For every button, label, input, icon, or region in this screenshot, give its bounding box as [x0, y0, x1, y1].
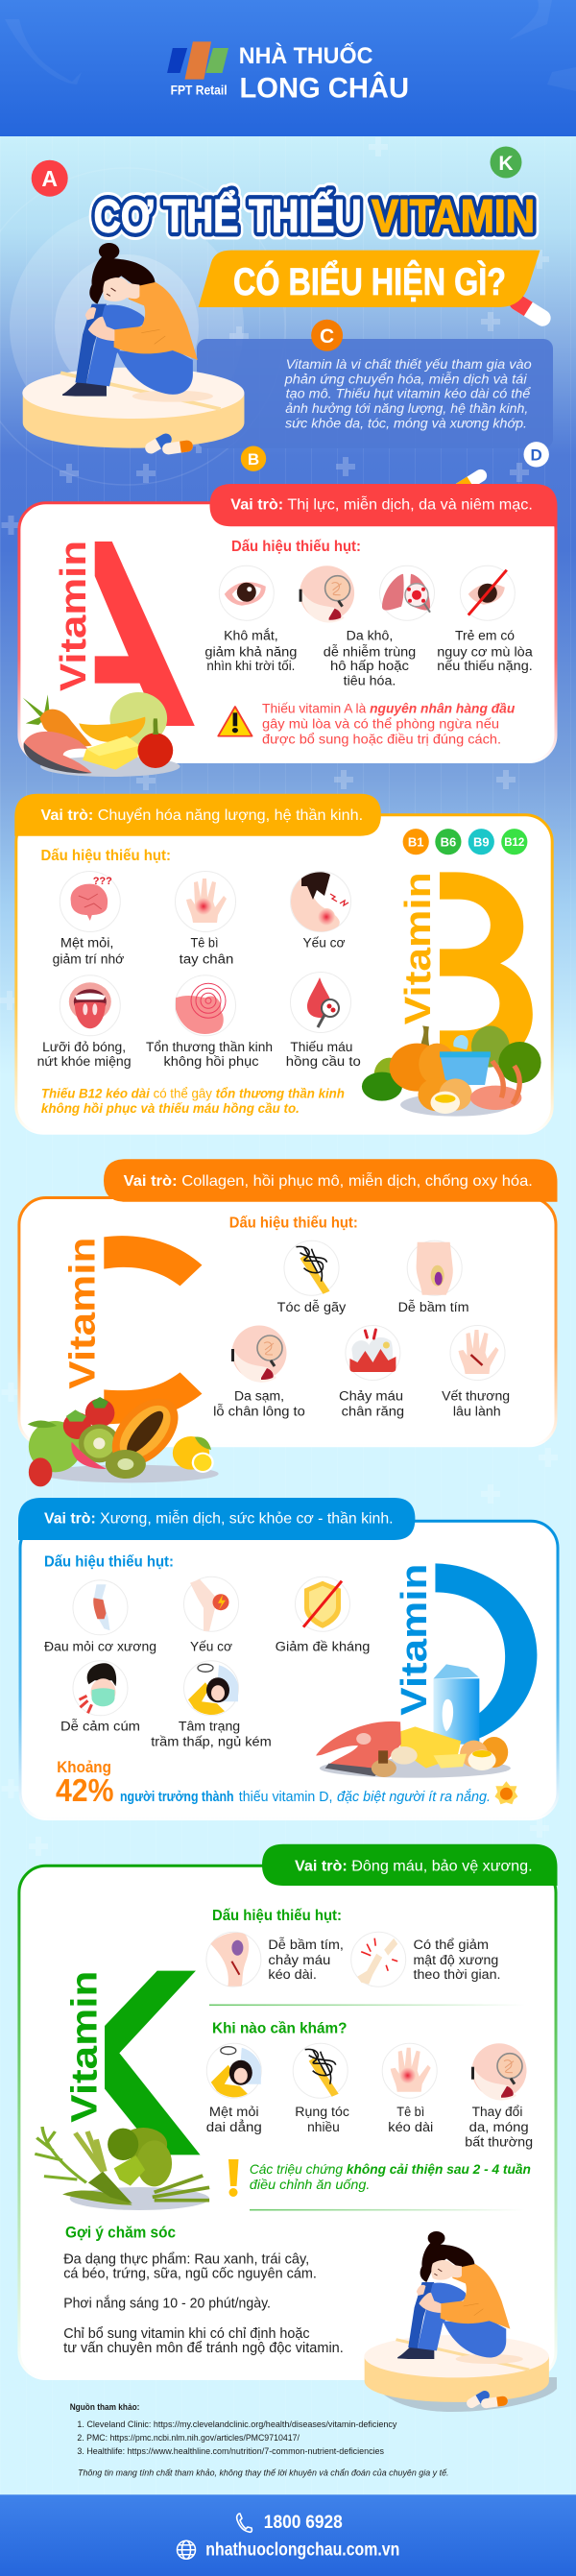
panel: vitamin K [19, 1844, 557, 2379]
big letter B [440, 872, 533, 1059]
callout: B12 [41, 1085, 345, 1116]
icon: weak bone [351, 1932, 406, 1986]
callout: symptoms: Các triệu chứng không cải thiện sau 2 - 4 tuần [250, 2161, 531, 2177]
callout: symptoms: điều chỉnh ăn uống. [250, 2177, 370, 2192]
icon: low immunity shield [296, 1577, 349, 1631]
label: fatigue: Mệt mỏi [209, 2105, 259, 2119]
label: hair loss: Rụng tóc [295, 2105, 349, 2119]
label: blindness risk: nếu thiếu nặng. [437, 659, 533, 673]
icon: bleeding gums [346, 1325, 400, 1381]
intro paragraph: phản ứng chuyển hóa, miễn dịch và tái [284, 372, 528, 386]
decorative plus signs [0, 137, 558, 1856]
text: bruising: Dễ bầm tím, [268, 1938, 344, 1952]
brand line 2: LONG CHÂU [240, 72, 409, 105]
icon: knee weakness [184, 1577, 238, 1631]
footer [0, 2494, 576, 2576]
website: nhathuoclongchau.com.vn [205, 2540, 399, 2561]
illustration: woman on pill, lower [364, 2231, 549, 2402]
references: 3. Healthlife: https://www.healthline.com/nutrition/7-common-nutrient-deficiencies [77, 2446, 384, 2456]
label: tongue: Lưỡi đỏ bóng, [42, 1040, 126, 1054]
title outline: VITAMIN [372, 192, 535, 243]
heading: signs: Dấu hiệu thiếu hụt: [40, 848, 171, 864]
icon: red tongue [60, 975, 120, 1036]
heading: signs: Dấu hiệu thiếu hụt: [44, 1554, 174, 1571]
panel: vitamin D [18, 1498, 558, 1818]
label: nerve damage [146, 1040, 273, 1069]
vertical word Vitamin: Vitamin [63, 1238, 104, 1389]
badge K: K [498, 153, 514, 175]
subtitle banner [199, 251, 540, 307]
tab: role [262, 1844, 557, 1886]
badge C [311, 320, 343, 351]
stat: 42 percent: 42% [56, 1772, 113, 1808]
big letter A [95, 542, 195, 726]
label: skin change: Thay đổi [472, 2105, 522, 2119]
title navy outline: VITAMIN [372, 192, 535, 243]
text: bone density: mật độ xương [413, 1953, 498, 1967]
label: dull skin: Da sạm, [234, 1388, 284, 1403]
icon: globe [177, 2540, 196, 2559]
icon: spine pain [73, 1580, 128, 1635]
decorative glass spheres [0, 168, 285, 485]
badges: B vitamins: B12 [504, 837, 524, 849]
title outline: CƠ THỂ THIẾU [94, 191, 362, 243]
references [70, 2402, 448, 2478]
badges: B vitamins: B6 [441, 835, 456, 849]
icon: abnormal skin [471, 2043, 526, 2101]
stat: 42 percent: đặc biệt người ít ra nắng. [337, 1789, 491, 1805]
label: weak muscle: Yếu cơ [190, 1639, 232, 1653]
label: fatigue: dai dẳng [206, 2120, 262, 2134]
tab: role: Vai trò: Đông máu, bảo vệ xương. [295, 1858, 533, 1874]
icon: infected lungs [380, 566, 434, 620]
icon: persistent fatigue [206, 2043, 261, 2098]
badge C: C [320, 325, 334, 348]
food: vitamin D sources [316, 1664, 511, 1778]
intro paragraph: Vitamin là vi chất thiết yếu tham gia vào [286, 357, 532, 372]
label: low immunity: Giảm đề kháng [276, 1639, 370, 1653]
icon: slow healing wound [450, 1325, 505, 1381]
text: bone density: Có thể giảm [413, 1938, 489, 1952]
text: bone density [413, 1938, 501, 1982]
badge D [524, 442, 549, 467]
icon: brain fatigue: ??? [93, 876, 112, 887]
label: fatigue: giảm trí nhớ [53, 951, 124, 966]
big letter C [104, 1236, 202, 1424]
pill shadow [370, 2377, 557, 2412]
callout: B12: không hồi phục và thiếu máu hồng cầu to. [41, 1100, 300, 1116]
badge A [32, 160, 68, 197]
label: mood: trầm thấp, ngủ kém [151, 1734, 272, 1748]
label: nerve damage: không hồi phục [163, 1054, 259, 1069]
vertical word Vitamin: Vitamin [54, 541, 94, 691]
label: dry eye: nhìn khi trời tối. [206, 659, 295, 673]
intro paragraph [284, 357, 532, 431]
intro paragraph: tạo mô. Thiếu hụt vitamin kéo dài có thể [286, 387, 532, 401]
tab: role: Vai trò: Collagen, hồi phục mô, miễn dịch, chống oxy hóa. [124, 1171, 533, 1190]
vertical word Vitamin: Vitamin [398, 872, 439, 1024]
illustration: sad woman on pill [22, 243, 244, 448]
warning text: được bổ sung hoặc điều trị đúng cách. [262, 731, 501, 746]
warning text [262, 700, 516, 746]
tab: role [104, 1159, 557, 1202]
food: vitamin C sources [28, 1388, 219, 1486]
icon: sun [494, 1781, 517, 1804]
text: care tips: Đa dạng thực phẩm: Rau xanh, trái cây, [63, 2251, 309, 2267]
text: bruising [268, 1938, 344, 1982]
icon: bruise hand [407, 1240, 462, 1295]
logo caption: FPT Retail [171, 83, 228, 98]
icon: numb hand [175, 872, 236, 931]
label: fatigue [206, 2105, 262, 2134]
title [94, 191, 535, 243]
references: Nguồn tham khảo: [70, 2402, 139, 2413]
label: anemia: Thiếu máu [290, 1040, 352, 1054]
text: bruising: kéo dài. [268, 1967, 317, 1982]
label: skin change: da, móng [469, 2120, 529, 2134]
food: vitamin B sources [362, 1025, 541, 1117]
label: anemia: hồng cầu to [286, 1054, 361, 1069]
label: nerve damage: Tổn thương thần kinh [146, 1040, 273, 1054]
label: numbness: Tê bì [190, 936, 219, 951]
label: tongue [37, 1040, 132, 1069]
icon: brittle hair [284, 1240, 339, 1295]
text: bone density: theo thời gian. [413, 1967, 501, 1982]
label: gums [339, 1388, 404, 1418]
logo mark stripes [167, 41, 228, 80]
references: Thông tin mang tính chất tham khảo, không thay thế lời khuyên và chẩn đoán của chuyên gia y tế. [78, 2468, 449, 2478]
intro paragraph: sức khỏe da, tóc, móng và xương khớp. [285, 417, 527, 431]
label: tongue: nứt khóe miệng [37, 1054, 132, 1069]
text: care tips [63, 2251, 344, 2356]
badge D: D [531, 446, 542, 465]
label: brittle hair: Tóc dễ gãy [277, 1300, 347, 1314]
tab: role [14, 794, 381, 836]
label: pain: Đau mỏi cơ xương [44, 1639, 156, 1653]
heading: signs: Dấu hiệu thiếu hụt: [231, 539, 361, 555]
big letter K [105, 1971, 201, 2155]
label: dry eye: Khô mắt, [224, 629, 278, 643]
icon: yellow white capsule [451, 467, 490, 497]
brand line 1: NHÀ THUỐC [239, 42, 373, 69]
label: skin change [465, 2105, 533, 2150]
references: 2. PMC: https://pmc.ncbi.nlm.nih.gov/articles/PMC9710417/ [77, 2433, 300, 2443]
badge K [490, 146, 522, 179]
panel: vitamin A [19, 484, 557, 777]
stat: 42 percent: người trưởng thành [120, 1790, 234, 1805]
label: blindness risk [437, 629, 533, 673]
text: care tips: tư vấn chuyên môn để tránh ngộ độc vitamin. [63, 2341, 344, 2356]
badge A: A [41, 166, 58, 191]
food: vitamin K sources [35, 2127, 209, 2210]
badge B [241, 445, 266, 471]
label: wounds: lâu lành [453, 1404, 501, 1418]
phone number: 1800 6928 [264, 2513, 343, 2533]
icon: exclamation mark [228, 2159, 238, 2197]
label: fatigue: Mệt mỏi, [60, 936, 113, 951]
icon: small capsules on hero [143, 431, 194, 456]
label: dry skin: dễ nhiễm trùng [324, 644, 416, 659]
icon: low mood [184, 1661, 238, 1716]
vertical word Vitamin: Vitamin [64, 1971, 105, 2123]
label: easy bruising: Dễ bầm tím [398, 1300, 469, 1314]
heading: when to see a doctor: Khi nào cần khám? [212, 2020, 348, 2036]
icon: nerve damage [175, 975, 236, 1036]
vertical word Vitamin: Vitamin [395, 1564, 435, 1716]
stat: 42 percent [56, 1758, 491, 1808]
title navy outline: CƠ THỂ THIẾU [94, 191, 362, 243]
label: mood: Tâm trạng [179, 1719, 240, 1733]
label: numbness: kéo dài [388, 2120, 433, 2134]
icon: dry eye [219, 566, 274, 620]
icon: muscle weakness [290, 872, 351, 931]
label: dry eye [204, 629, 297, 673]
tab: role [209, 484, 557, 526]
heading: signs: Dấu hiệu thiếu hụt: [212, 1908, 342, 1924]
icon: blood drop [290, 972, 351, 1033]
icon: warning triangle [218, 707, 252, 736]
label: dry eye: giảm khả năng [204, 644, 297, 659]
label: blindness risk: nguy cơ mù lòa [437, 644, 533, 659]
tab: role: Vai trò: Xương, miễn dịch, sức khỏe cơ - thần kinh. [44, 1509, 394, 1528]
header band [0, 0, 576, 136]
label: dull skin: lỗ chân lông to [213, 1404, 305, 1418]
icon: hair loss [293, 2043, 348, 2098]
big letter D [435, 1563, 537, 1743]
panel: vitamin B [14, 794, 552, 1133]
tab: role [18, 1498, 415, 1540]
label: wounds: Vết thương [442, 1388, 510, 1403]
label: numbness [388, 2105, 433, 2134]
text: care tips: cá béo, trứng, sữa, ngũ cốc nguyên cám. [63, 2266, 317, 2281]
title line white part: CƠ THỂ THIẾU [94, 191, 362, 243]
callout: B12: Thiếu B12 kéo dài có thể gây tổn thương thần kinh [41, 1085, 345, 1100]
subtitle text: CÓ BIỂU HIỆN GÌ? [233, 258, 506, 303]
label: fatigue [53, 936, 124, 966]
badges: B vitamins: B9 [473, 835, 490, 849]
icon: night blindness eye [460, 566, 515, 620]
intro paragraph: ảnh hưởng tới năng lượng, hệ thần kinh, [285, 401, 528, 416]
label: numbness: tay chân [180, 951, 233, 966]
icon: cold and flu [73, 1661, 128, 1716]
references: 1. Cleveland Clinic: https://my.clevelandclinic.org/health/diseases/vitamin-deficiency [77, 2420, 397, 2429]
label: numbness: Tê bì [396, 2105, 424, 2119]
title word vitamin: VITAMIN [372, 192, 535, 243]
heading: care tips: Gợi ý chăm sóc [65, 2224, 176, 2242]
label: blindness risk: Trẻ em có [455, 629, 515, 643]
label: skin change: bất thường [465, 2135, 533, 2150]
icon: brain fatigue [60, 872, 120, 931]
tab: role: Vai trò: Chuyển hóa năng lượng, hệ thần kinh. [40, 807, 363, 824]
badge B: B [248, 450, 259, 469]
label: dull skin [213, 1388, 305, 1418]
icon: phone [237, 2514, 252, 2532]
icon: dry skin [300, 566, 354, 623]
label: muscle weakness: Yếu cơ [303, 936, 346, 951]
label: hair loss: nhiều [307, 2120, 340, 2134]
label: dry skin [324, 629, 416, 687]
warning text: gây mù lòa và có thể phòng ngừa nếu [262, 716, 499, 732]
icon: red white capsule [506, 291, 554, 329]
heading: signs: Dấu hiệu thiếu hụt: [229, 1216, 358, 1232]
tab: role: Vai trò: Thị lực, miễn dịch, da và niêm mạc. [230, 495, 533, 514]
text: care tips: Phơi nắng sáng 10 - 20 phút/ngày. [63, 2295, 271, 2311]
label: wounds [442, 1388, 510, 1418]
icon: bruised leg [206, 1932, 261, 1986]
label: dry skin: tiêu hóa. [344, 673, 396, 687]
badges: B vitamins [403, 829, 527, 855]
text: bruising: chảy máu [268, 1953, 330, 1967]
label: colds: Dễ cảm cúm [60, 1719, 140, 1733]
label: dry skin: Da khô, [347, 629, 393, 643]
callout: symptoms [250, 2161, 531, 2192]
label: gums: chân răng [342, 1404, 404, 1418]
icon: small capsules lower [465, 2389, 509, 2410]
text: care tips: Chỉ bổ sung vitamin khi có chỉ định hoặc [63, 2326, 310, 2342]
panel: vitamin C [19, 1159, 557, 1486]
logo: FPT Retail Long Châu [167, 41, 409, 105]
label: mood [151, 1719, 272, 1748]
icon: dull skin [231, 1325, 286, 1383]
label: dry skin: hô hấp hoặc [330, 659, 409, 673]
badges: B vitamins: B1 [408, 835, 424, 849]
label: gums: Chảy máu [339, 1388, 403, 1403]
stat: 42 percent: thiếu vitamin D, [239, 1790, 332, 1805]
label: hair loss [295, 2105, 349, 2134]
intro text panel [197, 339, 553, 448]
icon: prolonged numbness [382, 2043, 437, 2098]
label: anemia [286, 1040, 361, 1069]
stat: 42 percent: Khoảng [57, 1758, 111, 1776]
food: vitamin A sources [23, 692, 180, 777]
warning text: Thiếu vitamin A là nguyên nhân hàng đầu [262, 700, 516, 715]
label: numbness [180, 936, 233, 966]
